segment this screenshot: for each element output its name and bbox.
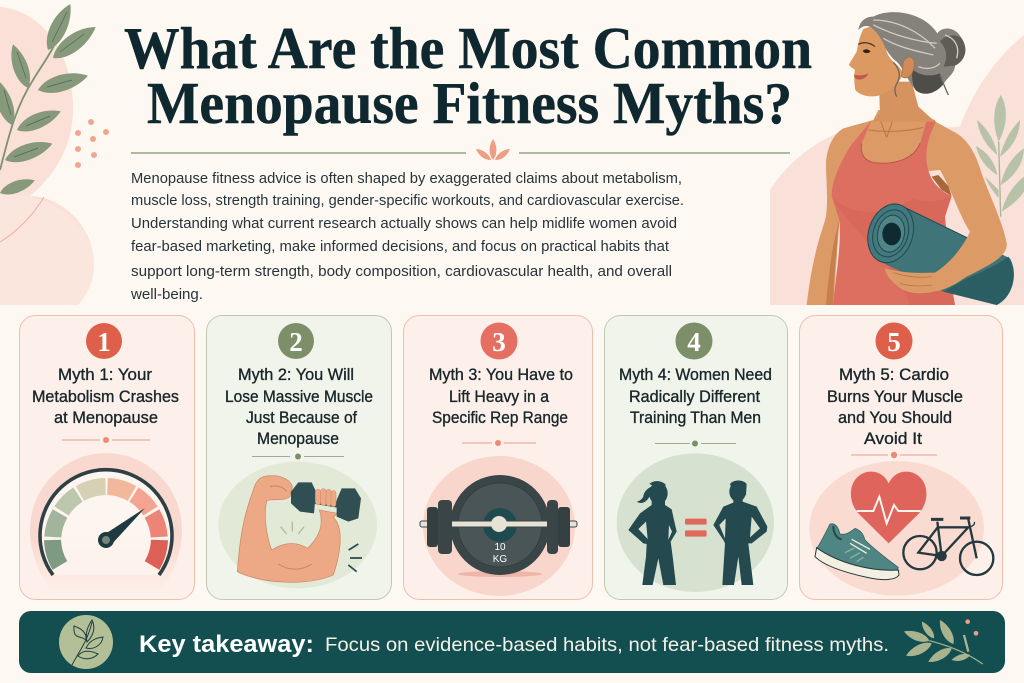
hair mass [858,12,965,94]
icon: left leaf sprig [0,0,100,198]
heading myth 2 [225,365,373,448]
title divider with lotus [131,139,790,160]
mouth [854,73,869,80]
tank top [832,117,955,305]
takeaway text: Focus on evidence-based habits, not fear-based fitness myths. [325,634,889,656]
right upper arm [928,117,1007,243]
heading myth 2: Just Because of [246,408,357,427]
head and hair [849,12,965,122]
banner: key takeaway [19,611,1005,673]
heading myth 2: Lose Massive Muscle [225,387,373,406]
heading myth 1: Myth 1: Your [58,365,152,384]
heading myth 4: Training Than Men [630,408,761,427]
heading myth 5: Burns Your Muscle [827,387,963,406]
number badge 3: 3 [492,327,506,357]
intro paragraph: muscle loss, strength training, gender-specific workouts, and cardiovascular exercise. [131,193,684,209]
heading myth 3: Myth 3: You Have to [429,365,573,384]
heading myth 4 [619,365,772,427]
heading myth 1: Metabolism Crashes [32,387,179,406]
icon: coral dots [75,119,109,168]
title [124,15,812,136]
forearm and hand [885,232,1007,293]
face [849,27,903,96]
number badge 2: 2 [289,327,303,357]
number badge 3 [480,322,518,360]
intro paragraph: Menopause fitness advice is often shaped by exaggerated claims about metabolism, [131,171,682,187]
number badge 1 [86,323,122,359]
woman silhouette [628,481,677,585]
intro paragraph: Understanding what current research actually shows can help midlife women avoid [131,216,677,232]
man silhouette [713,480,767,585]
heading myth 1 [32,365,179,427]
blob and heart [809,461,984,596]
yoga mat [880,204,1014,305]
panel: myth 4 [604,316,788,600]
number badge 4: 4 [687,327,701,357]
takeaway text: Key takeaway: [139,631,314,658]
background wash and pale sprig [770,35,1024,305]
neck [872,82,935,122]
panel: myth 1 [20,316,194,600]
heading myth 3: Lift Heavy in a [449,387,549,406]
torso, arms and mat [807,110,1014,305]
heading myth 5: Myth 5: Cardio [839,365,949,384]
heading myth 1: at Menopause [54,408,158,427]
heading myth 4: Radically Different [629,387,760,406]
ear [902,57,914,78]
panel: myth 2 [206,316,392,600]
intro paragraph: support long-term strength, body composition, cardiovascular health, and overall [131,264,672,280]
chest, shoulders and left arm [807,110,940,305]
icon: woman and man silhouettes with equals sign [617,453,774,592]
panel: myth 5 [800,316,1002,600]
icon: leaf emblem [59,615,113,669]
title: What Are the Most Common [124,15,812,81]
takeaway text [139,631,889,658]
heading myth 5: and You Should [838,408,952,427]
heading myth 4: Myth 4: Women Need [619,365,772,384]
number badge 4 [676,322,712,360]
bicycle [903,518,993,575]
icon: speedometer gauge [30,453,182,592]
shoe [815,524,899,580]
icon: barbell with 10 kg plate [420,456,577,596]
number badge 1: 1 [97,327,111,357]
illustration: woman with yoga mat [770,12,1024,305]
icon: banner sprig [902,618,983,666]
heading myth 2: Myth 2: You Will [238,365,354,384]
heading myth 3: Specific Rep Range [432,408,568,427]
number badge 5 [876,322,912,360]
heading myth 5 [827,365,963,448]
heading myth 3 [429,365,573,427]
eye and brow [858,43,875,47]
shoe and bicycle [815,518,993,580]
number badge 5: 5 [887,327,901,357]
heading myth 2: Menopause [257,429,339,448]
decorative blobs: top left [0,7,94,305]
heading myth 5: Avoid It [864,429,922,448]
icon: heart, running shoe and bicycle [809,461,993,596]
panel: myth 3 [404,316,592,600]
hair highlights [873,20,958,68]
intro paragraph: well-being. [130,287,203,303]
icon: barbell with 10 kg plate: KG [493,554,507,565]
number badge 2 [278,323,314,359]
title: Menopause Fitness Myths? [147,70,792,136]
icon: barbell with 10 kg plate: 10 [494,542,506,553]
intro paragraph [130,171,684,303]
icon: flexed arm with dumbbell [218,462,377,588]
intro paragraph: fear-based marketing, make informed decisions, and focus on practical habits that [131,239,669,255]
